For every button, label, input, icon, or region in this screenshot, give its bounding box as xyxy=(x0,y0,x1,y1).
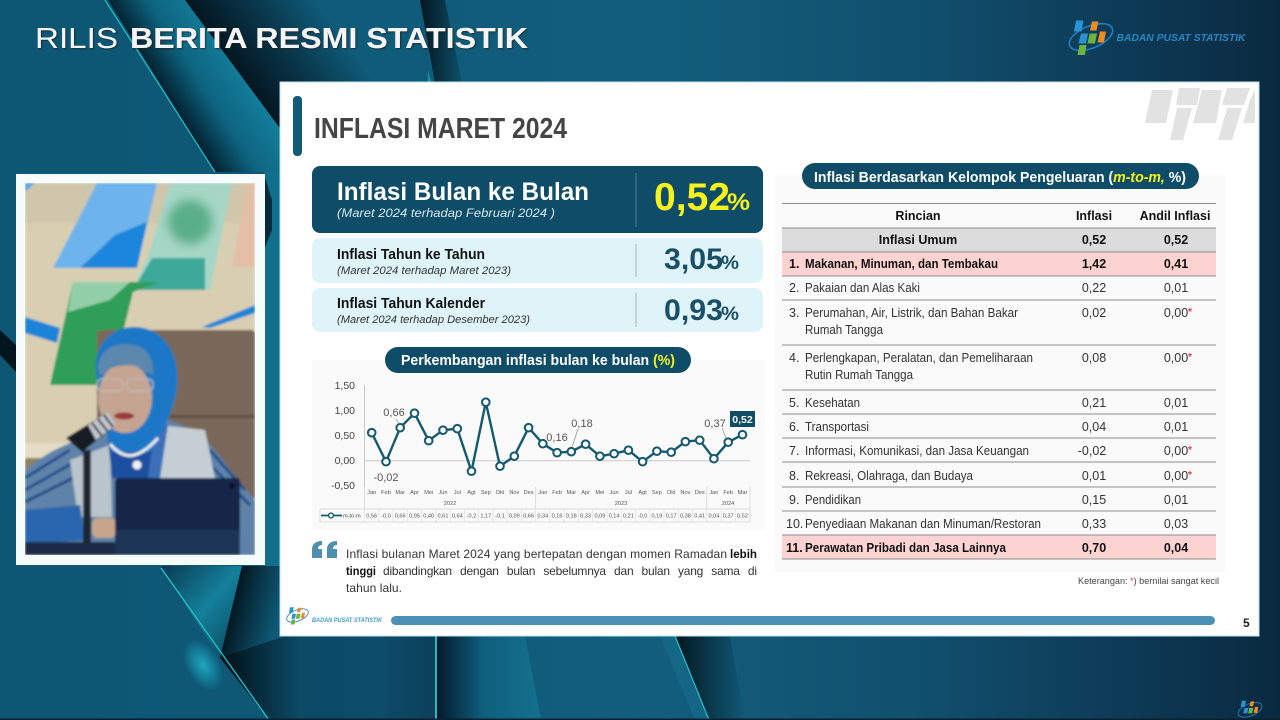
row 6: 6. xyxy=(789,420,799,434)
month axis: Agt xyxy=(638,490,647,496)
data table row: 1,17 xyxy=(480,514,491,520)
month axis: Des xyxy=(524,490,534,496)
line chart: perkembangan inflasi bulan ke bulan xyxy=(312,347,765,530)
panel: inflasi tahun kalender: 0,93 xyxy=(664,294,723,327)
row 9: Pendidikan xyxy=(805,493,861,507)
panel: inflasi tahun ke tahun: 3,05 xyxy=(664,243,723,276)
callout: quote note xyxy=(312,541,757,595)
data table row: 0,34 xyxy=(537,514,548,520)
row 3: Perumahan, Air, Listrik, dan Bahan Bakar xyxy=(805,306,1018,320)
data markers xyxy=(368,398,746,475)
row 10: 0,03 xyxy=(1164,517,1188,531)
month axis: Agt xyxy=(467,490,476,496)
row 10 xyxy=(786,517,1188,531)
logo: Badan Pusat Statistik header: BADAN PUSAT STATISTIK xyxy=(1116,32,1247,44)
data table row: 0,40 xyxy=(423,514,434,520)
row backgrounds xyxy=(782,228,1216,559)
month axis: 2022 xyxy=(444,501,456,507)
row: inflasi umum: 0,52 xyxy=(1164,233,1188,247)
month axis: Mar xyxy=(566,490,576,496)
month axis: Jan xyxy=(538,490,547,496)
panel: inflasi bulan ke bulan: Inflasi Bulan ke Bulan xyxy=(337,178,589,206)
data table row xyxy=(321,513,748,520)
heading: RILIS BERITA RESMI STATISTIK: RILIS xyxy=(35,23,118,55)
row 11 xyxy=(786,541,1188,555)
row 6: 0,04 xyxy=(1082,420,1106,434)
row 8 xyxy=(789,469,1192,483)
note text: tinggi xyxy=(346,564,376,578)
note text: Inflasi bulanan Maret 2024 yang bertepatan dengan momen Ramadan xyxy=(346,547,727,561)
row 2: 0,22 xyxy=(1082,281,1106,295)
heading: RILIS BERITA RESMI STATISTIK: BERITA RESMI STATISTIK xyxy=(130,23,528,55)
month axis: Nov xyxy=(509,490,519,496)
row 5: 0,01 xyxy=(1164,396,1188,410)
month axis: Jul xyxy=(454,490,461,496)
row: inflasi umum xyxy=(879,233,1188,247)
row 11: 0,04 xyxy=(1164,541,1188,555)
data line xyxy=(372,402,742,471)
row 4: Perlengkapan, Peralatan, dan Pemeliharaan xyxy=(805,351,1033,365)
row 9 xyxy=(789,493,1188,507)
table header xyxy=(895,209,1210,223)
row 7: 0,00 xyxy=(1164,444,1188,458)
row 9: 9. xyxy=(789,493,799,507)
row 3: Rumah Tangga xyxy=(805,323,883,337)
row 3: 0,02 xyxy=(1082,306,1106,320)
table: inflasi berdasarkan kelompok pengeluaran xyxy=(775,163,1225,572)
accent bar xyxy=(293,96,302,156)
row 1: 0,41 xyxy=(1164,257,1188,271)
row 4 xyxy=(789,351,1192,382)
panel: slide xyxy=(280,82,1259,636)
panel: inflasi tahun kalender: Inflasi Tahun Kalender xyxy=(337,296,485,312)
month axis: Jun xyxy=(438,490,448,496)
row 2: 0,01 xyxy=(1164,281,1188,295)
row 7 xyxy=(789,444,1192,458)
month axis: Apr xyxy=(581,490,590,496)
row 5: Kesehatan xyxy=(805,396,860,410)
data table row: 0,52 xyxy=(737,514,748,520)
row 4: Rutin Rumah Tangga xyxy=(805,368,913,382)
row 1: Makanan, Minuman, dan Tembakau xyxy=(805,257,998,271)
note text: dibandingkan dengan bulan sebelumnya dan bulan yang sama di xyxy=(383,564,757,578)
month axis: Mei xyxy=(595,490,604,496)
page number: 5 xyxy=(1243,616,1250,630)
row 1: 1. xyxy=(789,257,799,271)
slide title: INFLASI MARET 2024 xyxy=(314,113,567,145)
month axis: 2023 xyxy=(615,501,627,507)
row 4: 0,08 xyxy=(1082,351,1106,365)
row 8: * xyxy=(1188,470,1192,481)
month axis: 2024 xyxy=(722,501,734,507)
data labels: 0,18 xyxy=(571,418,593,430)
slide background xyxy=(280,82,1259,636)
row 8: 8. xyxy=(789,469,799,483)
data table row: 0,95 xyxy=(409,514,420,520)
row 8: 0,01 xyxy=(1082,469,1106,483)
panel: inflasi tahun kalender: (Maret 2024 terhadap Desember 2023) xyxy=(337,314,530,326)
row 2: Pakaian dan Alas Kaki xyxy=(805,281,920,295)
panel: inflasi bulan ke bulan xyxy=(312,166,763,233)
table header: Inflasi xyxy=(1076,209,1112,223)
data table row: 0,04 xyxy=(708,514,719,520)
row 10: Penyediaan Makanan dan Minuman/Restoran xyxy=(805,517,1041,531)
chart heading pill: Perkembangan inflasi bulan ke bulan (%) xyxy=(401,353,675,369)
row 7: Informasi, Komunikasi, dan Jasa Keuangan xyxy=(805,444,1029,458)
data labels: 0,66 xyxy=(383,407,405,419)
y axis: 0,00 xyxy=(335,455,355,467)
month axis: Sep xyxy=(481,490,491,496)
data table row: 0,56 xyxy=(366,514,377,520)
row 5: 5. xyxy=(789,396,799,410)
row 3 xyxy=(789,306,1192,337)
data table row: 0,66 xyxy=(523,514,534,520)
data table row: 0,19 xyxy=(651,514,662,520)
data table row: 0,66 xyxy=(395,514,406,520)
month axis: Feb xyxy=(552,490,562,496)
month axis: Sep xyxy=(652,490,662,496)
row 6: 0,01 xyxy=(1164,420,1188,434)
row 1 xyxy=(789,257,1188,271)
month axis: Mei xyxy=(424,490,433,496)
row rules xyxy=(782,204,1216,559)
data labels: 0,37 xyxy=(704,418,726,430)
month axis: Des xyxy=(695,490,705,496)
panel: inflasi tahun ke tahun: (Maret 2024 terhadap Maret 2023) xyxy=(337,265,511,277)
row 5: 0,21 xyxy=(1082,396,1106,410)
y axis: 1,50 xyxy=(335,380,355,392)
data table row: 0,17 xyxy=(666,514,677,520)
month axis: Mar xyxy=(395,490,405,496)
panel: inflasi bulan ke bulan: 0,52 xyxy=(654,176,730,219)
note text: lebih xyxy=(730,547,757,561)
logo: bottom right corner xyxy=(1238,700,1262,718)
data table row: 0,14 xyxy=(609,514,620,520)
row 4: * xyxy=(1188,352,1192,363)
footer agency name: BADAN PUSAT STATISTIK xyxy=(312,618,383,624)
note text: tahun lalu. xyxy=(346,581,402,595)
month axis: Okt xyxy=(496,490,505,496)
month axis xyxy=(320,487,750,522)
row 3: * xyxy=(1188,307,1192,318)
month axis: Jan xyxy=(367,490,376,496)
watermark logo xyxy=(1145,88,1255,140)
month axis: Mar xyxy=(738,490,747,496)
data table row: m-to-m xyxy=(343,514,361,520)
row 2: 2. xyxy=(789,281,799,295)
logo: footer xyxy=(285,606,310,625)
data table row: 0,37 xyxy=(723,514,734,520)
table heading pill xyxy=(802,163,1199,189)
row 3: 3. xyxy=(789,306,799,320)
data table row: -0,0 xyxy=(381,514,391,520)
y axis: -0,50 xyxy=(331,480,355,492)
table header: Andil Inflasi xyxy=(1140,209,1210,223)
row 4: 4. xyxy=(789,351,799,365)
panel: inflasi tahun ke tahun xyxy=(312,238,763,283)
panel: inflasi bulan ke bulan: % xyxy=(727,189,750,216)
chart heading pill xyxy=(385,347,691,373)
panel: inflasi bulan ke bulan: (Maret 2024 terhadap Februari 2024 ) xyxy=(337,206,555,220)
footer: logo, progress bar, page number xyxy=(285,606,1250,630)
data table row: 0,64 xyxy=(452,514,463,520)
data labels: 0,16 xyxy=(546,432,568,444)
month axis: Nov xyxy=(680,490,691,496)
data labels xyxy=(373,407,755,484)
month axis: Apr xyxy=(410,490,419,496)
row: inflasi umum: Inflasi Umum xyxy=(879,233,957,247)
row 7: * xyxy=(1188,445,1192,456)
row 6 xyxy=(789,420,1188,434)
data table row: 0,21 xyxy=(623,514,634,520)
panel: inflasi tahun ke tahun: % xyxy=(721,253,739,274)
month axis: Jan xyxy=(709,490,718,496)
panel: inflasi tahun ke tahun: Inflasi Tahun ke Tahun xyxy=(337,247,485,263)
month axis: Jul xyxy=(625,490,632,496)
row 11: 0,70 xyxy=(1082,541,1106,555)
y axis: 1,00 xyxy=(335,405,355,417)
month axis: Feb xyxy=(381,490,391,496)
row 9: 0,01 xyxy=(1164,493,1188,507)
row 9: 0,15 xyxy=(1082,493,1106,507)
data table row: 0,09 xyxy=(594,514,605,520)
data table row: -0,2 xyxy=(467,514,476,520)
row 6: Transportasi xyxy=(805,420,869,434)
data table row: 0,33 xyxy=(580,514,591,520)
row 10: 0,33 xyxy=(1082,517,1106,531)
table header: Rincian xyxy=(895,209,941,223)
panel: presenter video xyxy=(16,174,265,565)
row: inflasi umum: 0,52 xyxy=(1082,233,1106,247)
data table row: 0,41 xyxy=(694,514,705,520)
data labels: -0,02 xyxy=(373,472,399,484)
row 2 xyxy=(789,281,1188,295)
note text xyxy=(346,547,757,595)
row 10: 10. xyxy=(786,517,803,531)
panel: inflasi tahun kalender: % xyxy=(721,304,739,325)
data table row: 0,61 xyxy=(438,514,448,520)
table heading pill: Inflasi Berdasarkan Kelompok Pengeluaran (m-to-m, %) xyxy=(814,170,1186,186)
logo: Badan Pusat Statistik header xyxy=(1066,18,1247,56)
month axis: Jun xyxy=(610,490,619,496)
progress bar xyxy=(391,616,1215,625)
month axis: Feb xyxy=(723,490,733,496)
row 11: 11. xyxy=(786,541,803,555)
row 1: 1,42 xyxy=(1082,257,1106,271)
row 7: 7. xyxy=(789,444,799,458)
row 8: 0,00 xyxy=(1164,469,1188,483)
panel: inflasi tahun kalender xyxy=(312,288,763,332)
data labels: 0,52 xyxy=(732,414,753,426)
data table row: 0,18 xyxy=(566,514,577,520)
y axis xyxy=(331,380,750,492)
data table row: 0,38 xyxy=(680,514,691,520)
data table row: -0,1 xyxy=(495,514,505,520)
icon: quotation mark xyxy=(312,541,337,558)
row 3: 0,00 xyxy=(1164,306,1188,320)
row 7: -0,02 xyxy=(1078,444,1106,458)
data table row: 0,16 xyxy=(552,514,563,520)
footnote: keterangan: Keterangan: *) bernilai sangat kecil xyxy=(1078,576,1219,587)
row 5 xyxy=(789,396,1188,410)
y axis: 0,50 xyxy=(335,430,355,442)
data table row: 0,09 xyxy=(509,514,520,520)
month axis: Okt xyxy=(667,490,676,496)
row 11: Perawatan Pribadi dan Jasa Lainnya xyxy=(805,541,1007,555)
row 8: Rekreasi, Olahraga, dan Budaya xyxy=(805,469,973,483)
row 4: 0,00 xyxy=(1164,351,1188,365)
data table row: -0,0 xyxy=(638,514,647,520)
